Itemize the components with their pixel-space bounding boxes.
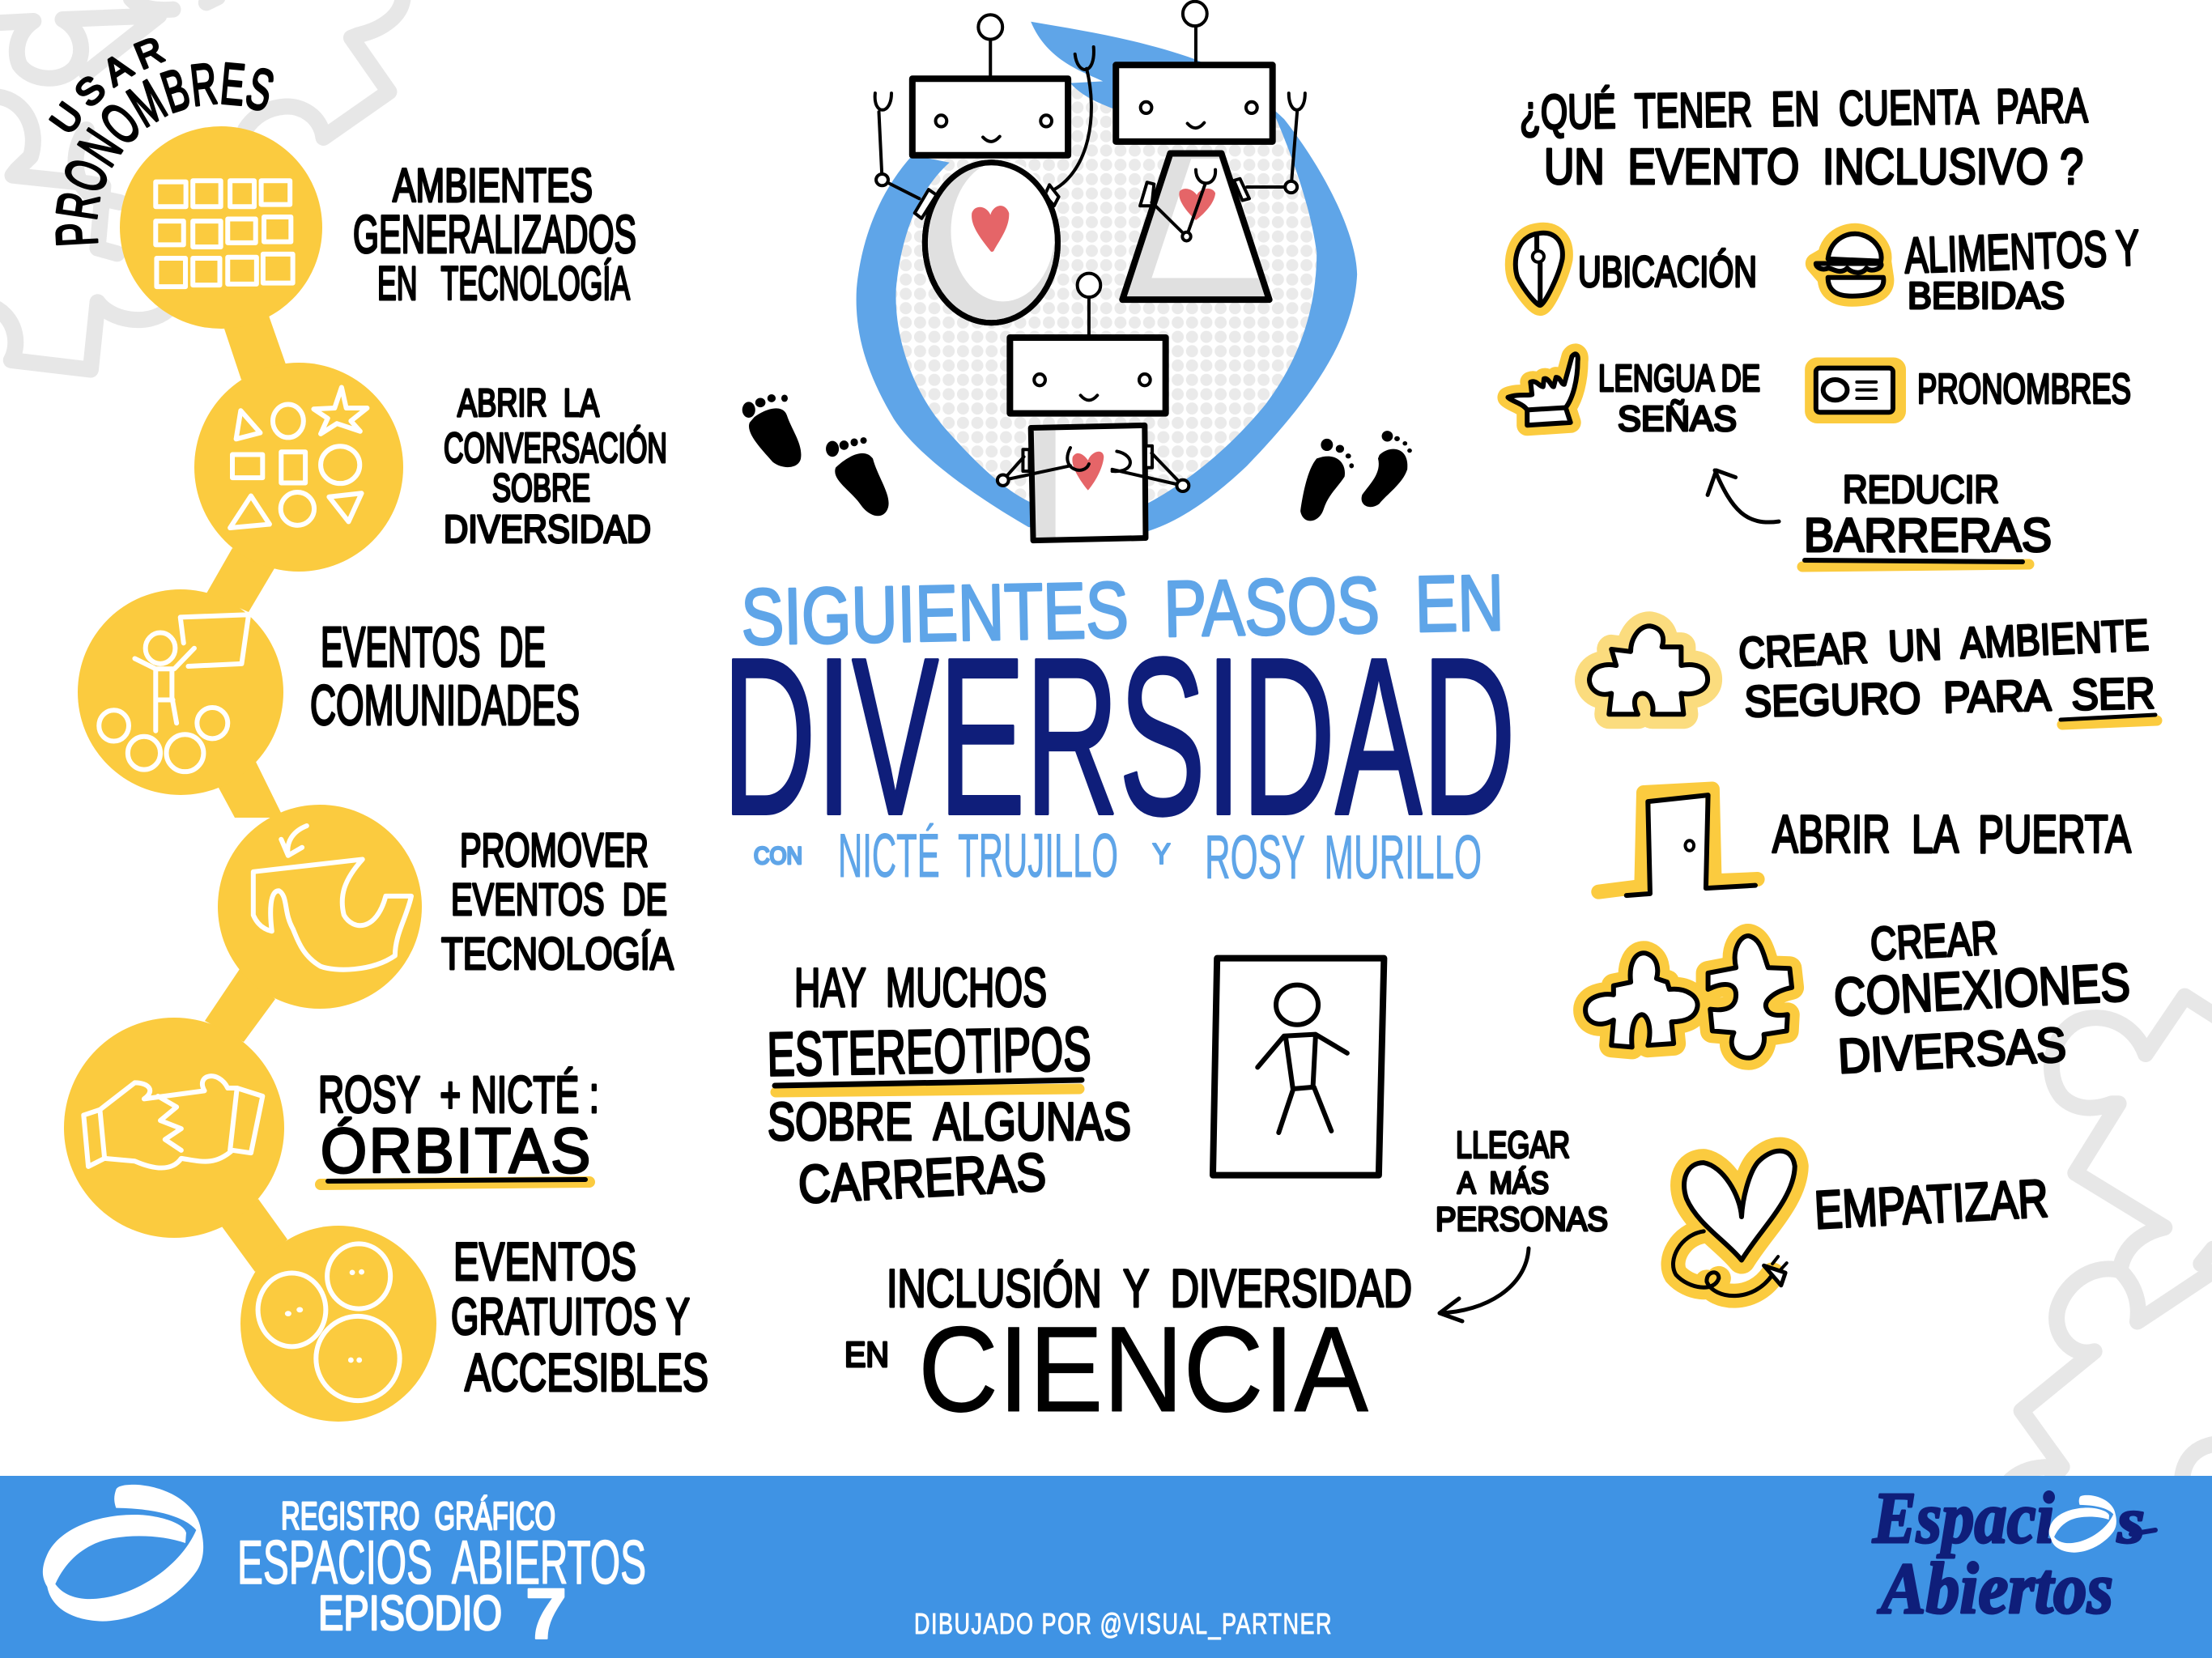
footer text: registro grafico: ESPACIOS ABIERTOS xyxy=(237,1528,646,1597)
text: reducir barreras: BARRERAS xyxy=(1804,509,2052,562)
footer band xyxy=(0,1476,2212,1658)
text: eventos de comunidades: EVENTOS DE xyxy=(321,615,546,678)
icon: door xyxy=(1598,789,1758,895)
icon: framed figure xyxy=(1213,959,1384,1175)
footer credit: DIBUJADO POR @VISUAL_PARTNER xyxy=(914,1607,1333,1640)
heading: que tener en cuenta xyxy=(1519,79,2088,195)
footer text: registro grafico: EPISODIO xyxy=(318,1586,502,1640)
text: eventos gratuitos xyxy=(451,1231,708,1402)
text: reducir barreras: REDUCIR xyxy=(1843,469,1999,512)
text: abrir la conversacion: DIVERSIDAD xyxy=(444,508,651,551)
curved heading: usar pronombres: USAR xyxy=(49,38,167,132)
icon: heart with plug xyxy=(1673,1151,1795,1296)
logo: white ring xyxy=(43,1485,203,1622)
arrow: reducir barreras xyxy=(1708,470,1779,522)
text: llegar a mas personas: PERSONAS xyxy=(1436,1200,1608,1238)
text: crear conexiones diversas: CREAR xyxy=(1869,912,1999,971)
icon: two puzzle pieces xyxy=(1585,936,1792,1058)
text: abrir la conversacion xyxy=(444,382,667,551)
background puzzle pieces top left xyxy=(0,0,403,370)
background puzzle piece bottom right xyxy=(2010,997,2212,1480)
text: eventos gratuitos: GRATUITOS Y xyxy=(451,1287,690,1346)
text: ambientes generalizados: AMBIENTES xyxy=(393,159,593,212)
title: siguientes pasos en: SIGUIENTES PASOS EN xyxy=(740,558,1504,661)
text: crear conexiones diversas xyxy=(1832,912,2131,1083)
icon: id card xyxy=(1805,357,1906,423)
arrow: to ciencia xyxy=(1440,1248,1529,1321)
text: lengua de senas: SEÑAS xyxy=(1618,398,1737,439)
subtitle: presenters: NICTÉ TRUJILLO xyxy=(838,822,1118,891)
text: inclusion y diversidad en ciencia: CIENCIA xyxy=(918,1301,1368,1437)
text: llegar a mas personas: LLEGAR xyxy=(1456,1124,1570,1166)
text: eventos gratuitos: ACCESIBLES xyxy=(465,1342,708,1402)
text: empatizar: EMPATIZAR xyxy=(1813,1167,2050,1240)
text: lengua de senas: LENGUA DE xyxy=(1598,357,1760,399)
text: llegar a mas personas: A MÁS xyxy=(1457,1166,1549,1201)
icon: assorted shapes xyxy=(230,387,367,528)
text: ambientes generalizados: EN TECNOLOGÍA xyxy=(377,257,630,310)
text: ambientes generalizados: GENERALIZADOS xyxy=(353,204,636,264)
text: rosy y nicte orbitas xyxy=(318,1065,599,1186)
text: crear un ambiente seguro xyxy=(1738,610,2157,726)
text: reducir barreras xyxy=(1802,469,2052,567)
text: crear un ambiente seguro: CREAR UN AMBIENTE xyxy=(1738,610,2150,678)
text: eventos de comunidades: COMUNIDADES xyxy=(310,674,580,737)
text: rosy y nicte orbitas: ROSY + NICTÉ : xyxy=(318,1065,599,1124)
text: crear un ambiente seguro: SEGURO PARA SER xyxy=(1744,670,2155,726)
subtitle: presenters: ROSY MURILLO xyxy=(1205,823,1482,892)
title: diversidad: DIVERSIDAD xyxy=(722,612,1516,861)
text: hay muchos estereotipos: ESTEREOTIPOS xyxy=(767,1015,1091,1089)
text: abrir la conversacion: CONVERSACIÓN xyxy=(444,425,667,472)
text: abrir la conversacion: SOBRE xyxy=(492,467,590,510)
logo: espacios abiertos script: s xyxy=(2116,1486,2145,1557)
text: ubicacion: UBICACIÓN xyxy=(1578,248,1757,296)
text: llegar a mas personas xyxy=(1436,1124,1608,1238)
heading: que tener en cuenta: UN EVENTO INCLUSIVO ? xyxy=(1544,139,2083,195)
text: hay muchos estereotipos xyxy=(767,957,1131,1214)
robot: round body xyxy=(875,15,1094,323)
text: promover eventos: TECNOLOGÍA xyxy=(441,928,674,979)
text: crear conexiones diversas: DIVERSAS xyxy=(1836,1018,2067,1083)
text: eventos de comunidades xyxy=(310,615,580,737)
text: hay muchos estereotipos: HAY MUCHOS xyxy=(794,957,1047,1018)
logo: espacios abiertos script xyxy=(1872,1478,2155,1629)
text: rosy y nicte orbitas: ÓRBITAS xyxy=(321,1115,593,1186)
logo: espacios abiertos script: Espaci xyxy=(1872,1478,2054,1558)
icon: grid of rectangles xyxy=(155,181,293,287)
text: inclusion y diversidad en ciencia xyxy=(844,1258,1412,1437)
icon: cup shape with arrow xyxy=(253,826,411,970)
subtitle: presenters: Y xyxy=(1152,837,1171,870)
text: inclusion y diversidad en ciencia: INCLUSIÓN Y DIVERSIDAD xyxy=(887,1258,1412,1318)
icon: footprints right xyxy=(1300,431,1412,521)
logo: espacios abiertos script: Abiertos xyxy=(1877,1549,2113,1629)
text: alimentos y bebidas xyxy=(1904,220,2140,317)
icon: fist bump xyxy=(83,1076,262,1168)
icon: burger xyxy=(1816,234,1883,296)
text: promover eventos: PROMOVER xyxy=(460,824,649,877)
text: promover eventos: EVENTOS DE xyxy=(451,874,667,925)
robot: square body xyxy=(998,274,1189,541)
text: promover eventos xyxy=(441,824,674,979)
icon: puzzle piece xyxy=(1589,626,1708,714)
footer text: registro grafico xyxy=(237,1495,646,1654)
illustration: blue ring with dots xyxy=(857,22,1357,532)
yellow chain of circles xyxy=(64,126,436,1422)
text: ambientes generalizados xyxy=(353,159,636,310)
text: inclusion y diversidad en ciencia: EN xyxy=(844,1335,889,1375)
text: alimentos y bebidas: BEBIDAS xyxy=(1908,274,2065,317)
text: lengua de senas xyxy=(1598,357,1760,439)
curved heading: usar pronombres: PRONOMBRES xyxy=(55,62,274,246)
footer text: registro grafico: REGISTRO GRÁFICO xyxy=(281,1495,555,1538)
subtitle: presenters xyxy=(754,822,1482,892)
robot: trapezoid body xyxy=(1116,2,1305,300)
text: eventos gratuitos: EVENTOS xyxy=(453,1231,636,1291)
text: abrir la conversacion: ABRIR LA xyxy=(457,382,599,425)
text: hay muchos estereotipos: SOBRE ALGUNAS xyxy=(768,1091,1131,1151)
icon: sign language hand xyxy=(1508,354,1578,425)
icon: three faces xyxy=(258,1244,400,1401)
icon: speaker with audience xyxy=(99,614,249,772)
text: hay muchos estereotipos: CARRERAS xyxy=(797,1141,1048,1214)
icon: location pin xyxy=(1516,233,1563,305)
subtitle: presenters: CON xyxy=(754,843,802,869)
footer text: registro grafico: 7 xyxy=(525,1574,567,1654)
text: crear conexiones diversas: CONEXIONES xyxy=(1832,952,2131,1027)
icon: footprints left xyxy=(742,394,889,516)
